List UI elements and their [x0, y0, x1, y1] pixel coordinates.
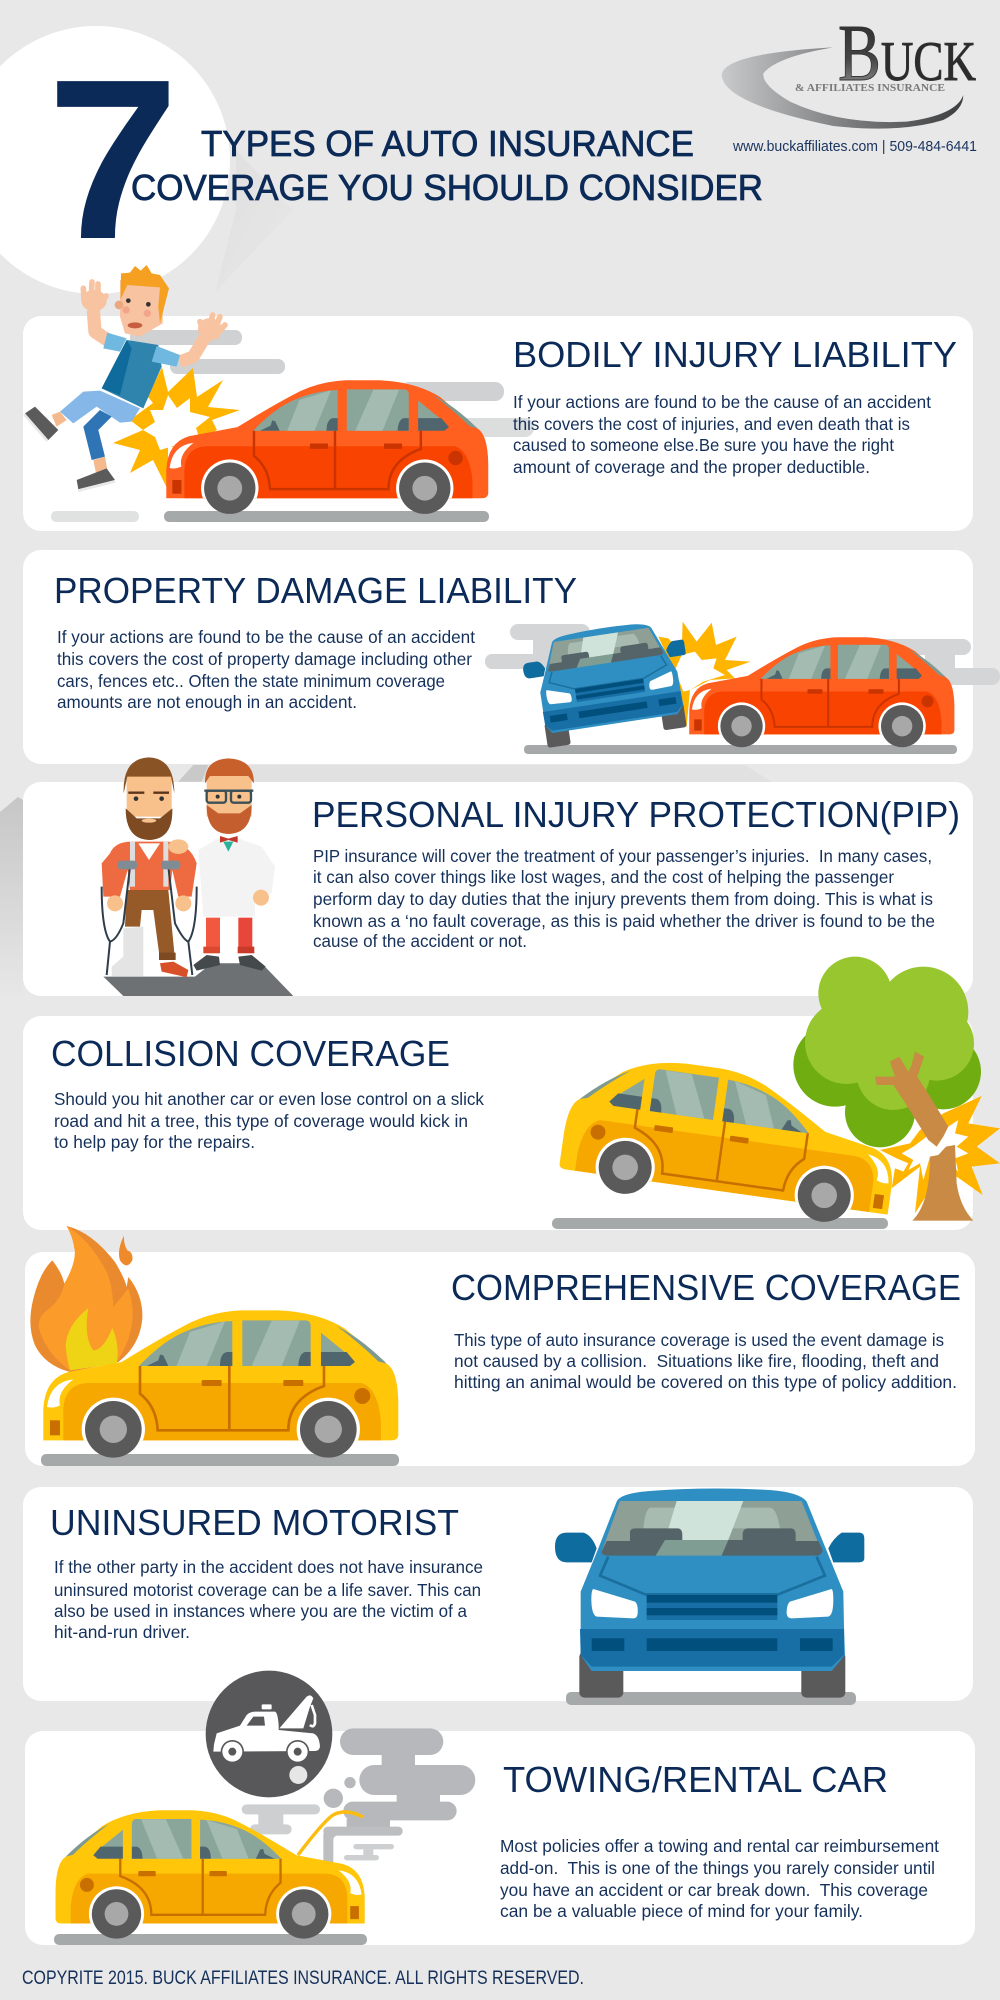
body text: amounts are not enough in an accident.: [57, 692, 357, 712]
ground bar: [41, 1454, 399, 1466]
icon: yellow car: [557, 1048, 905, 1231]
body text: can be a valuable piece of mind for your family.: [500, 1901, 863, 1921]
heading: TOWING/RENTAL CAR: [503, 1759, 888, 1800]
body text: cause of the accident or not.: [313, 931, 527, 951]
icon: injured man and doctor: [102, 757, 293, 996]
ground bar: [54, 1934, 367, 1945]
body text: If the other party in the accident does not have insurance: [54, 1557, 483, 1577]
body text: [57, 627, 475, 712]
heading: PROPERTY DAMAGE LIABILITY: [54, 570, 577, 611]
body text: [54, 1089, 484, 1152]
body text: perform day to day duties that the injury prevents them from doing. This is what is: [313, 889, 933, 909]
body text: hit-and-run driver.: [54, 1622, 190, 1642]
background arrow: left edge: [0, 797, 23, 1000]
body text: [54, 1557, 483, 1642]
ground bar: [524, 745, 957, 754]
background circle: [0, 26, 230, 294]
smoke: [242, 1728, 475, 1865]
title: TYPES OF AUTO INSURANCE: [201, 123, 694, 164]
icon: impact burst: [658, 622, 751, 727]
icon: red car: [166, 380, 488, 514]
icon: impact burst: [113, 367, 240, 490]
ground bar: [552, 1218, 888, 1229]
icon: blue car front: [555, 1489, 864, 1698]
body text: also be used in instances where you are the victim of a: [54, 1601, 467, 1621]
logo: Buck and Affiliates Insurance: BUCK: [838, 10, 976, 98]
body text: Should you hit another car or even lose control on a slick: [54, 1089, 484, 1109]
heading: PERSONAL INJURY PROTECTION(PIP): [312, 794, 960, 835]
icon: red car: [689, 637, 954, 747]
body text: cars, fences etc.. Often the state minimum coverage: [57, 671, 445, 691]
speed lines: [485, 624, 1000, 685]
body text: to help pay for the repairs.: [54, 1132, 255, 1152]
title: COVERAGE YOU SHOULD CONSIDER: [131, 167, 763, 208]
icon: blue car: [519, 616, 697, 750]
panel: personal injury protection: [23, 757, 973, 996]
icon: tree with impact burst: [793, 957, 1000, 1221]
background band behind panels: [178, 765, 772, 782]
logo: Buck and Affiliates Insurance: & AFFILIATES INSURANCE: [795, 82, 945, 94]
icon: fire: [30, 1226, 142, 1372]
body text: hitting an animal would be covered on this type of policy addition.: [454, 1372, 957, 1392]
body text: [513, 392, 931, 477]
body text: caused to someone else.Be sure you have the right: [513, 435, 894, 455]
panel: collision coverage: [23, 957, 1000, 1231]
body text: PIP insurance will cover the treatment of your passenger’s injuries. In many cases,: [313, 846, 932, 866]
heading: COMPREHENSIVE COVERAGE: [451, 1267, 961, 1308]
body text: This type of auto insurance coverage is used the event damage is: [454, 1330, 944, 1350]
heading: UNINSURED MOTORIST: [50, 1502, 459, 1543]
heading: COLLISION COVERAGE: [51, 1033, 450, 1074]
footer copyright: COPYRITE 2015. BUCK AFFILIATES INSURANCE. ALL RIGHTS RESERVED.: [22, 1968, 584, 1989]
body text: not caused by a collision. Situations like fire, flooding, theft and: [454, 1351, 939, 1371]
body text: uninsured motorist coverage can be a life saver. This can: [54, 1580, 481, 1600]
icon: yellow car: [43, 1310, 398, 1458]
big number seven: 7: [47, 33, 179, 287]
speed lines: [130, 330, 534, 437]
body text: [313, 846, 935, 951]
heading: BODILY INJURY LIABILITY: [513, 334, 957, 375]
icon: yellow car: [56, 1810, 365, 1939]
body text: this covers the cost of injuries, and even death that is: [513, 414, 910, 434]
panel: uninsured motorist: [23, 1487, 973, 1705]
ground bars: [51, 511, 489, 522]
body text: amount of coverage and the proper deductible.: [513, 457, 870, 477]
body text: you have an accident or car break down. This coverage: [500, 1880, 928, 1900]
title: [131, 123, 763, 208]
body text: Most policies offer a towing and rental car reimbursement: [500, 1836, 939, 1856]
body text: [500, 1836, 939, 1921]
background arrow: [215, 150, 293, 292]
logo: Buck and Affiliates Insurance: [722, 10, 976, 129]
icon: falling man: [23, 265, 225, 492]
body text: this covers the cost of property damage including other: [57, 649, 472, 669]
panel: bodily injury liability: [23, 265, 973, 531]
icon: tow truck badge: [206, 1671, 332, 1797]
ground bar: [566, 1692, 856, 1705]
body text: road and hit a tree, this type of coverage would kick in: [54, 1111, 468, 1131]
body text: If your actions are found to be the cause of an accident: [57, 627, 475, 647]
body text: If your actions are found to be the cause of an accident: [513, 392, 931, 412]
icon: open hood: [298, 1812, 363, 1855]
panel: property damage liability: [23, 550, 1000, 764]
body text: add-on. This is one of the things you rarely consider until: [500, 1858, 935, 1878]
body text: it can also cover things like lost wages, and the cost of helping the passenger: [313, 867, 894, 887]
body text: [454, 1330, 957, 1392]
website and phone: www.buckaffiliates.com | 509-484-6441: [732, 139, 977, 155]
body text: known as a ‘no fault coverage, as this is paid whether the driver is found to be the: [313, 911, 935, 931]
panel: towing and rental car: [25, 1671, 975, 1945]
panel: comprehensive coverage: [25, 1226, 975, 1466]
